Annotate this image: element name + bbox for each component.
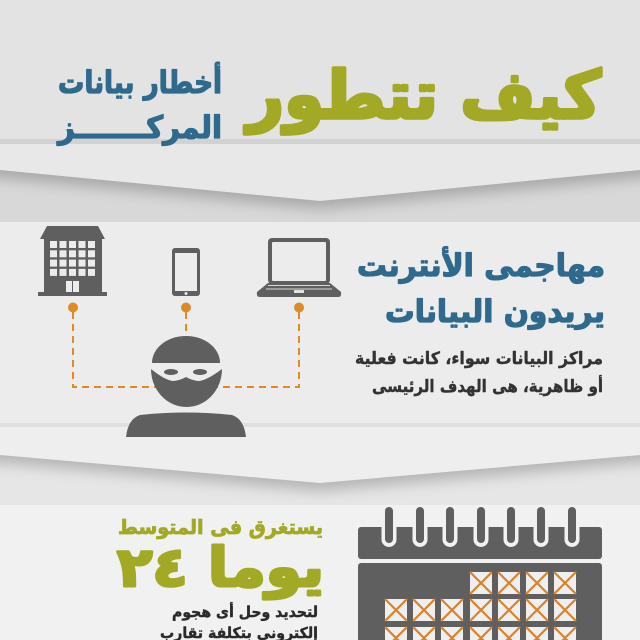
body text: attackers: مراكز البيانات سواء، كانت فعلية bbox=[355, 349, 603, 369]
stat description bbox=[160, 602, 318, 640]
dashed connectors bbox=[73, 312, 299, 387]
calendar day squares bbox=[385, 572, 576, 640]
connector dots bbox=[68, 302, 304, 312]
section 2 background bbox=[0, 222, 640, 427]
header background bbox=[0, 0, 640, 140]
icon: calendar bbox=[358, 507, 602, 640]
subtitle: المركـــــــز bbox=[56, 110, 222, 146]
stat lead-in: يستغرق فى المتوسط bbox=[118, 515, 323, 539]
stat: 24 days: يوما ٢٤ bbox=[117, 536, 324, 599]
heading: attackers: يريدون البيانات bbox=[385, 294, 605, 330]
icon: office building bbox=[38, 226, 107, 296]
heading: attackers: مهاجمى الأنترنت bbox=[357, 246, 605, 284]
icon: masked hacker bbox=[126, 336, 246, 437]
icon: laptop bbox=[257, 238, 341, 297]
stat description: لتحديد وحل أى هجوم bbox=[172, 602, 318, 621]
main title: كيف تتطور bbox=[244, 57, 602, 135]
section 3 background bbox=[0, 505, 640, 640]
subtitle: أخطار بيانات bbox=[58, 62, 222, 101]
calendar rings bbox=[382, 507, 580, 547]
heading: attackers bbox=[357, 246, 605, 330]
icon: smartphone bbox=[172, 248, 200, 296]
subtitle bbox=[56, 62, 222, 146]
calendar crosses bbox=[385, 572, 576, 640]
body text: attackers: أو ظاهرية، هى الهدف الرئيسى bbox=[372, 375, 603, 397]
body text: attackers bbox=[355, 349, 603, 397]
